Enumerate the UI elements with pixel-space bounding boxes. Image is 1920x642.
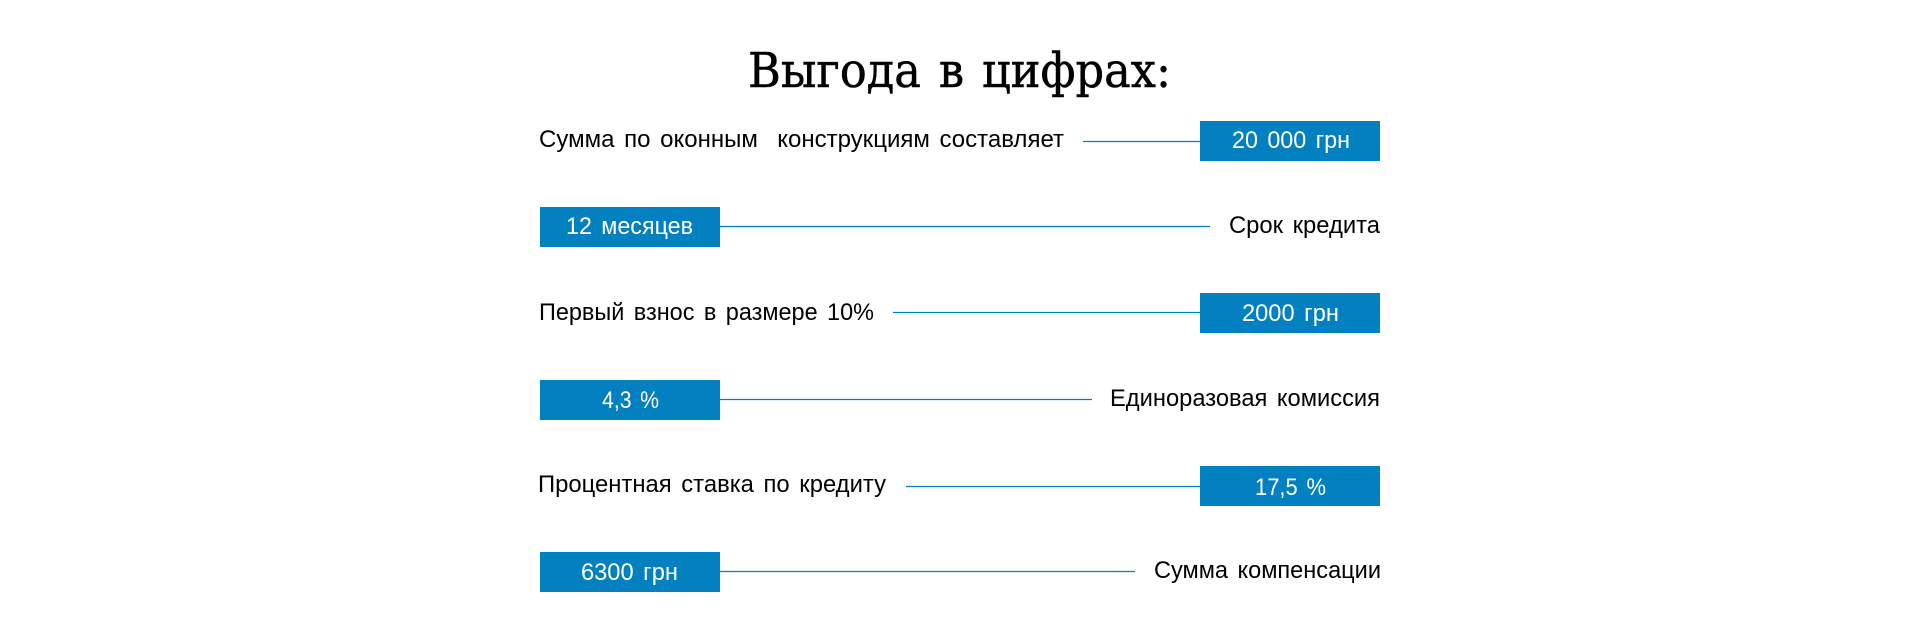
value: 6300 грн [581,559,678,586]
row 4: one-time commission [540,380,1380,420]
label: term: Срок кредита [1229,212,1381,239]
connector line [720,398,1092,400]
value box [540,207,720,247]
value: 17,5 % [1255,474,1326,501]
connector line [720,570,1135,572]
connector line [893,312,1200,314]
row 1: window construction sum [539,121,1380,161]
connector line [906,486,1200,488]
row 5: interest rate [538,466,1380,506]
connector line [720,226,1210,228]
label: sum: Сумма по оконным конструкциям составляет [539,126,1064,153]
row 6: compensation sum [540,552,1381,592]
value: 20 000 грн [1232,127,1350,154]
label: interest rate: Процентная ставка по кредиту [538,471,886,498]
value box [1200,121,1380,161]
value box [540,380,720,420]
title: Выгода в цифрах: [748,43,1171,99]
label: first payment: Первый взнос в размере 10% [539,299,874,326]
label: compensation: Сумма компенсации [1154,557,1381,584]
label: commission: Единоразовая комиссия [1110,385,1380,412]
connector line [1083,140,1200,142]
value: 12 месяцев [566,213,693,240]
value: 2000 грн [1242,300,1339,327]
row 2: credit term [540,207,1381,247]
value box [1200,466,1380,506]
value box [1200,293,1380,333]
value: 4,3 % [602,387,659,414]
row 3: first payment [539,293,1380,333]
value box [540,552,720,592]
